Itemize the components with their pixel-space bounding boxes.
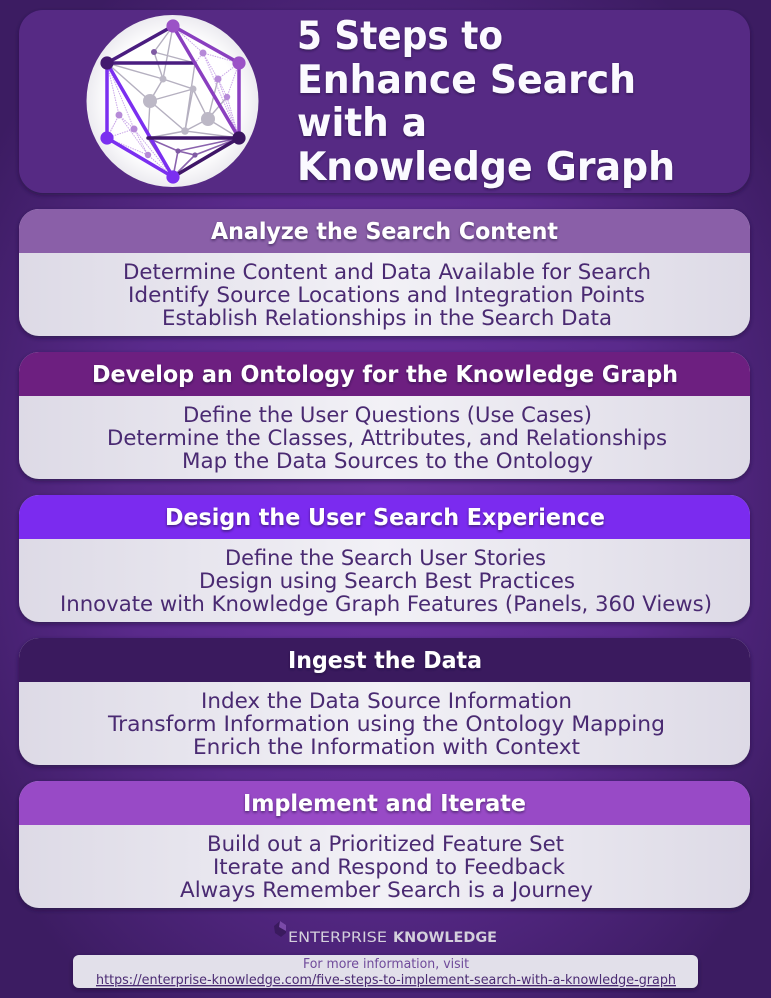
title: with a bbox=[297, 101, 427, 146]
text block: step 2 items: Determine the Classes, Attributes, and Relationships bbox=[107, 426, 667, 450]
heading: step 5: Implement and Iterate bbox=[243, 791, 526, 817]
text block: step 5 items bbox=[180, 832, 593, 902]
text block: step 4 items: Index the Data Source Information bbox=[201, 689, 572, 713]
title: Enhance Search bbox=[297, 58, 636, 103]
footer logo: enterprise knowledge bbox=[274, 921, 497, 946]
text block: step 3 items bbox=[60, 546, 712, 616]
panel: develop an ontology bbox=[19, 352, 750, 479]
panel: design the user search experience bbox=[19, 495, 750, 622]
callout: more information link bbox=[73, 955, 698, 988]
text block: step 4 items: Transform Information using the Ontology Mapping bbox=[107, 712, 665, 736]
text block: step 5 items: Iterate and Respond to Feedback bbox=[213, 855, 566, 879]
text block: step 4 items bbox=[107, 689, 665, 759]
text block: step 1 items: Establish Relationships in the Search Data bbox=[162, 306, 612, 330]
text block: step 3 items: Innovate with Knowledge Graph Features (Panels, 360 Views) bbox=[60, 592, 712, 616]
text block: step 4 items: Enrich the Information with Context bbox=[193, 735, 580, 759]
panel: implement and iterate bbox=[19, 781, 750, 908]
title: 5 Steps to bbox=[297, 14, 503, 59]
callout: more information link: For more information, visit bbox=[303, 957, 469, 972]
text block: step 2 items: Define the User Questions (Use Cases) bbox=[183, 403, 592, 427]
title bbox=[297, 14, 675, 190]
text block: step 1 items bbox=[123, 260, 651, 330]
footer logo: enterprise knowledge: ENTERPRISE bbox=[288, 930, 387, 946]
text block: step 5 items: Always Remember Search is a Journey bbox=[180, 878, 593, 902]
header panel bbox=[19, 10, 750, 193]
text block: step 3 items: Design using Search Best Practices bbox=[199, 569, 575, 593]
title: Knowledge Graph bbox=[297, 145, 675, 190]
text block: step 1 items: Determine Content and Data Available for Search bbox=[123, 260, 651, 284]
text block: step 3 items: Define the Search User Stories bbox=[225, 546, 546, 570]
heading: step 1: Analyze the Search Content bbox=[211, 219, 558, 245]
heading: step 2: Develop an Ontology for the Knowledge Graph bbox=[92, 362, 678, 388]
callout: more information link: https://enterprise-knowledge.com/five-steps-to-implement-search-with-a-knowledge-graph bbox=[96, 972, 676, 988]
heading: step 3: Design the User Search Experience bbox=[165, 505, 605, 531]
panel: ingest the data bbox=[19, 638, 750, 765]
icon: knowledge graph logo bbox=[86, 15, 258, 187]
heading: step 4: Ingest the Data bbox=[288, 648, 482, 674]
footer logo: enterprise knowledge: KNOWLEDGE bbox=[393, 930, 497, 946]
text block: step 1 items: Identify Source Locations and Integration Points bbox=[128, 283, 645, 307]
panel: analyze the search content bbox=[19, 209, 750, 336]
text block: step 2 items: Map the Data Sources to the Ontology bbox=[182, 449, 593, 473]
text block: step 2 items bbox=[107, 403, 667, 473]
text block: step 5 items: Build out a Prioritized Feature Set bbox=[207, 832, 564, 856]
